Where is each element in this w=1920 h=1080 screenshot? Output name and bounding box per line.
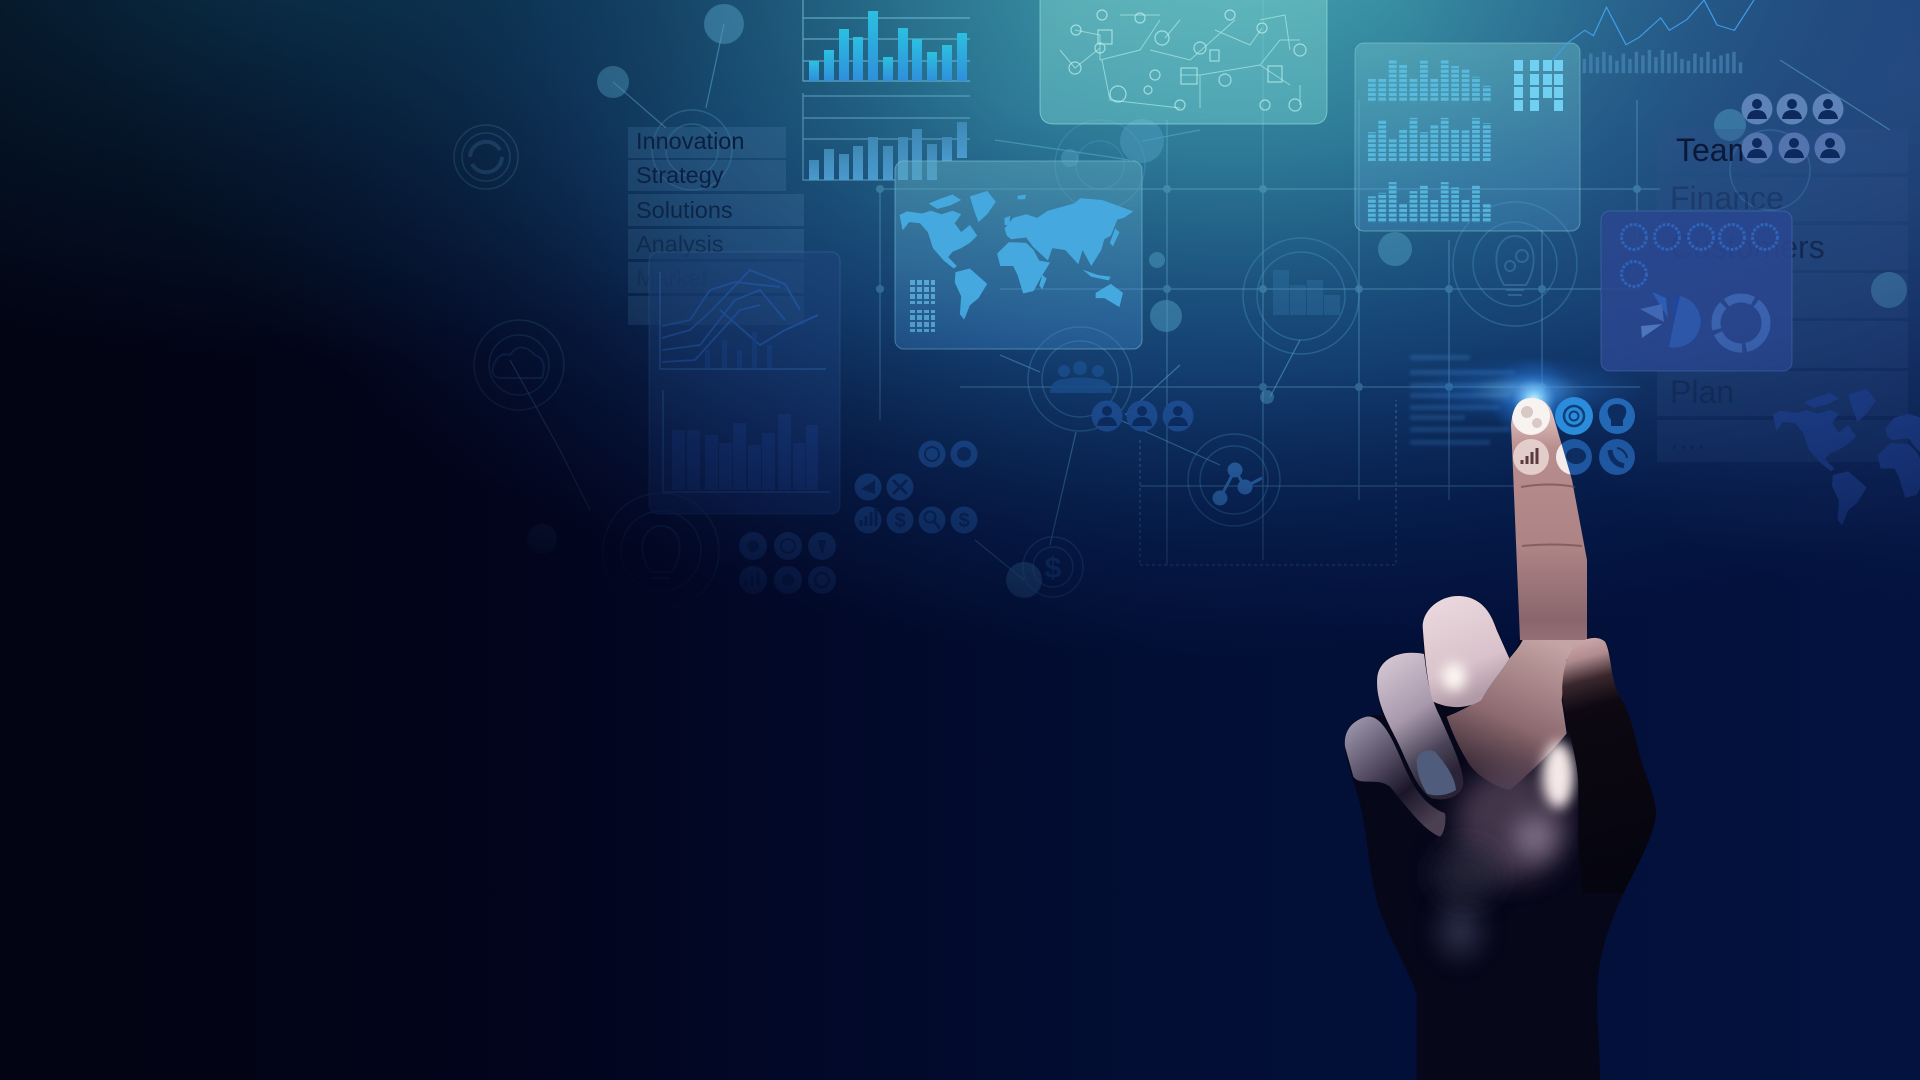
data rings (454, 110, 1810, 609)
icon: dollar ring: $ (1045, 552, 1062, 585)
icons: business tool cluster (854, 440, 978, 534)
menu list left: Market (636, 265, 708, 291)
menu list left: Innovation (636, 128, 744, 154)
menu list right: .... (1670, 420, 1706, 456)
network grid (876, 0, 1660, 565)
fingertip glow (1408, 356, 1648, 444)
panel: pie and donut (1601, 211, 1792, 371)
curled fingers and thumb (1345, 596, 1656, 893)
icon: chat button (1556, 439, 1592, 475)
menu list right: Plan (1670, 374, 1734, 410)
faded horizontal bars near finger (1409, 354, 1518, 446)
icon: phone button (1599, 439, 1635, 475)
progress rings (1622, 224, 1778, 286)
equalizer bars (1368, 59, 1491, 223)
hand palm (1345, 597, 1656, 1080)
panel: world map (895, 161, 1142, 349)
menu list right: Team (1676, 132, 1754, 168)
hand (1345, 398, 1656, 1080)
world map right (1773, 389, 1920, 525)
icon: sync arrows (470, 142, 502, 172)
icons: left cluster (739, 532, 836, 594)
menu list left: Analysis (636, 231, 724, 257)
fingertip icons (1512, 398, 1570, 475)
icon: lightbulb (1496, 236, 1534, 295)
panel: line chart and bars (649, 252, 840, 514)
icons: people row centre (1092, 400, 1194, 432)
icons: business tool cluster: $ (894, 510, 906, 532)
panel: circuit network (1040, 0, 1327, 124)
world map main (900, 191, 1133, 320)
network nodes (527, 4, 1907, 598)
icons: business tool cluster: $ (958, 510, 970, 532)
menu list right: Customers (1670, 229, 1825, 265)
holographic interface layer (454, 0, 1920, 609)
index finger (1511, 398, 1587, 640)
pie chart (1640, 292, 1701, 348)
icon: cloud (492, 348, 544, 378)
icon: team silhouette (1050, 361, 1112, 393)
data blocks ring (1273, 270, 1340, 315)
icon: network graph (1214, 464, 1262, 504)
icon: bulb button (1599, 398, 1635, 434)
panel: equalizer charts (1355, 43, 1580, 231)
finger creases (1521, 484, 1582, 546)
bar chart top (803, 0, 970, 81)
donut chart (1716, 298, 1766, 348)
icons: people grid top right (1742, 94, 1846, 164)
line chart top right (1552, 0, 1754, 73)
palm shading (1433, 638, 1587, 957)
icon: target (1555, 397, 1593, 435)
menu list left: Strategy (636, 162, 724, 188)
connector lines (510, 24, 1890, 580)
menu list left (628, 127, 804, 325)
icon: left lightbulb (642, 525, 680, 568)
menu list right (1657, 129, 1908, 462)
menu list right: Finance (1670, 180, 1784, 216)
bar chart second (803, 93, 970, 180)
menu list left: Solutions (636, 197, 733, 223)
